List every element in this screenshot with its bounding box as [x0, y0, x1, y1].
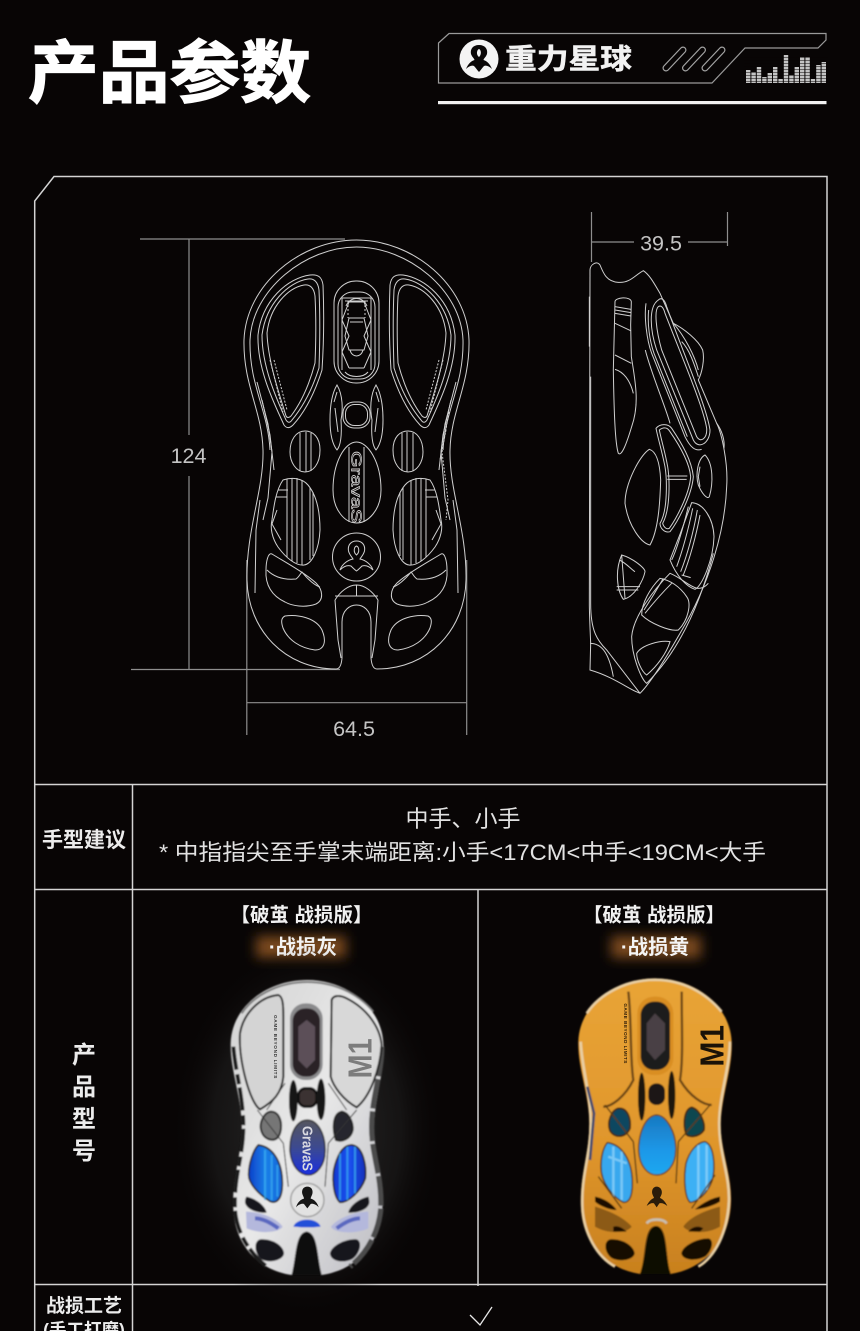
scroll wheel — [334, 281, 379, 383]
label: product model: 产 — [72, 1042, 96, 1069]
icon: equalizer — [744, 55, 828, 83]
dimension 124: 124 — [171, 444, 206, 468]
hand size recommendation — [159, 806, 766, 865]
icon: three slashes — [666, 50, 722, 68]
edition name: 【破茧 战损版】 — [583, 904, 725, 926]
mouse right half outline — [356, 240, 469, 669]
label: distressed craft: 战损工艺 — [46, 1295, 122, 1317]
colour tag: grey: ·战损灰 — [269, 936, 337, 959]
central slot with wordmark — [333, 442, 381, 523]
panel: yellow edition — [578, 904, 732, 1274]
label: product model: 型 — [72, 1106, 96, 1133]
wordmark: GravaS — [298, 1126, 314, 1171]
panel: grey edition — [172, 904, 442, 1315]
edition name: 【破茧 战损版】 — [231, 904, 372, 926]
product image: yellow mouse — [578, 978, 732, 1274]
side profile outline — [589, 263, 727, 693]
tagline: GAME BEYOND LIMITS — [623, 1003, 628, 1063]
diagram: top view of mouse — [131, 239, 469, 741]
badge frame — [438, 34, 826, 83]
model mark M1: M1 — [342, 1038, 379, 1078]
icon: check mark — [470, 1307, 492, 1325]
halo behind grey mouse — [172, 945, 442, 1315]
dimension 64.5: 64.5 — [333, 717, 375, 741]
product image: grey mouse — [231, 980, 384, 1275]
hand sizes: 中手、小手 — [406, 806, 520, 832]
emblem — [647, 1187, 667, 1207]
dimension 124 — [131, 239, 345, 670]
hand size note: * 中指指尖至手掌末端距离:小手<17CM<中手<19CM<大手 — [159, 840, 766, 865]
dimension 39.5 — [592, 212, 728, 262]
label: product model — [72, 1042, 96, 1165]
label: distressed craft — [43, 1295, 125, 1331]
logo circle — [332, 533, 380, 581]
brand name: 重力星球 — [505, 44, 632, 74]
icon: brand logo — [460, 40, 498, 78]
label: product model: 号 — [72, 1138, 96, 1165]
spec table frame — [35, 176, 827, 1331]
title: 产品参数 — [28, 36, 311, 112]
central slot with wordmark: GravaS — [348, 451, 364, 523]
tagline: GAME BEYOND LIMITS — [273, 1015, 278, 1078]
diagram: side view of mouse — [589, 212, 728, 693]
mouse left half outline — [244, 240, 356, 669]
colour tag: yellow: ·战损黄 — [621, 936, 689, 959]
dimension 39.5: 39.5 — [640, 232, 682, 256]
label: hand size: 手型建议 — [42, 829, 126, 852]
underline — [438, 101, 826, 104]
label: product model: 品 — [72, 1074, 96, 1101]
dimension 64.5 — [247, 560, 467, 741]
dpi button — [343, 402, 370, 428]
right side grip detail — [440, 412, 449, 520]
emblem — [296, 1187, 319, 1208]
model mark M1: M1 — [694, 1025, 731, 1067]
brand badge — [438, 34, 828, 104]
